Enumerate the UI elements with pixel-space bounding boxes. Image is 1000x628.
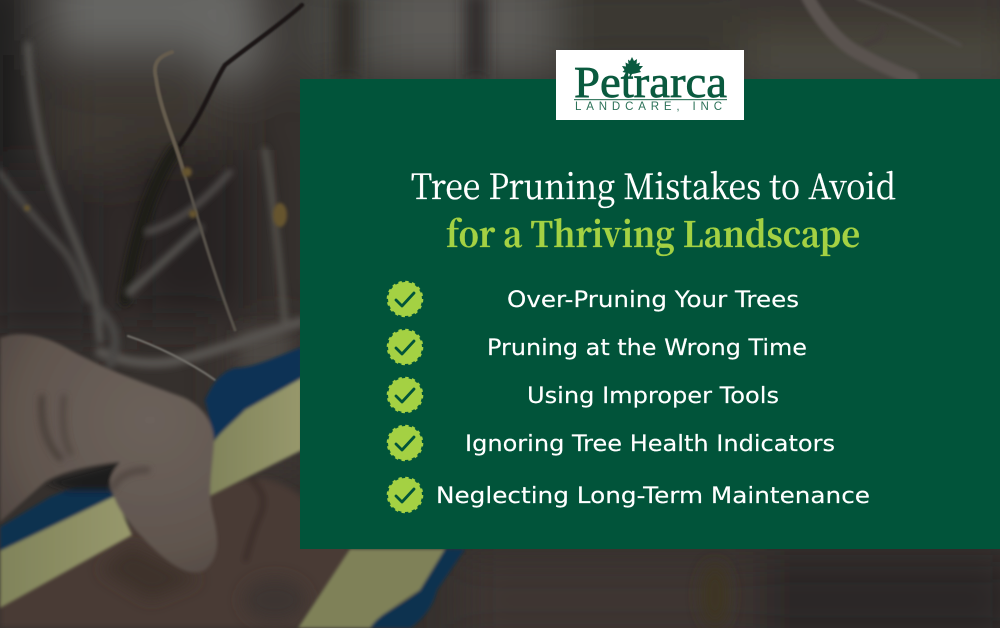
logo — [556, 50, 744, 120]
item 5: Neglecting Long-Term Maintenance — [436, 483, 870, 509]
logo tagline: LANDCARE, INC — [575, 101, 722, 113]
logo wordmark: Petrarca — [574, 58, 727, 107]
sharp twigs — [128, 5, 302, 380]
item 1: Over-Pruning Your Trees — [507, 287, 799, 313]
top right branch — [808, 0, 960, 78]
item 3: Using Improper Tools — [527, 383, 779, 409]
title: Tree Pruning Mistakes to Avoid — [411, 160, 896, 210]
panel: green content panel — [300, 50, 1000, 549]
item 2 — [388, 330, 807, 364]
item 4: Ignoring Tree Health Indicators — [465, 431, 835, 457]
icon: maple leaf — [622, 57, 643, 78]
title highlight: for a Thriving Landscape — [446, 208, 860, 258]
title — [411, 160, 896, 258]
blurred branches — [0, 45, 300, 365]
item 4 — [388, 426, 835, 460]
item 3 — [388, 378, 779, 412]
item 1 — [388, 282, 799, 316]
item 5 — [388, 478, 870, 512]
list of mistakes — [388, 282, 870, 512]
item 2: Pruning at the Wrong Time — [487, 335, 807, 361]
hand and pruner — [0, 478, 350, 628]
